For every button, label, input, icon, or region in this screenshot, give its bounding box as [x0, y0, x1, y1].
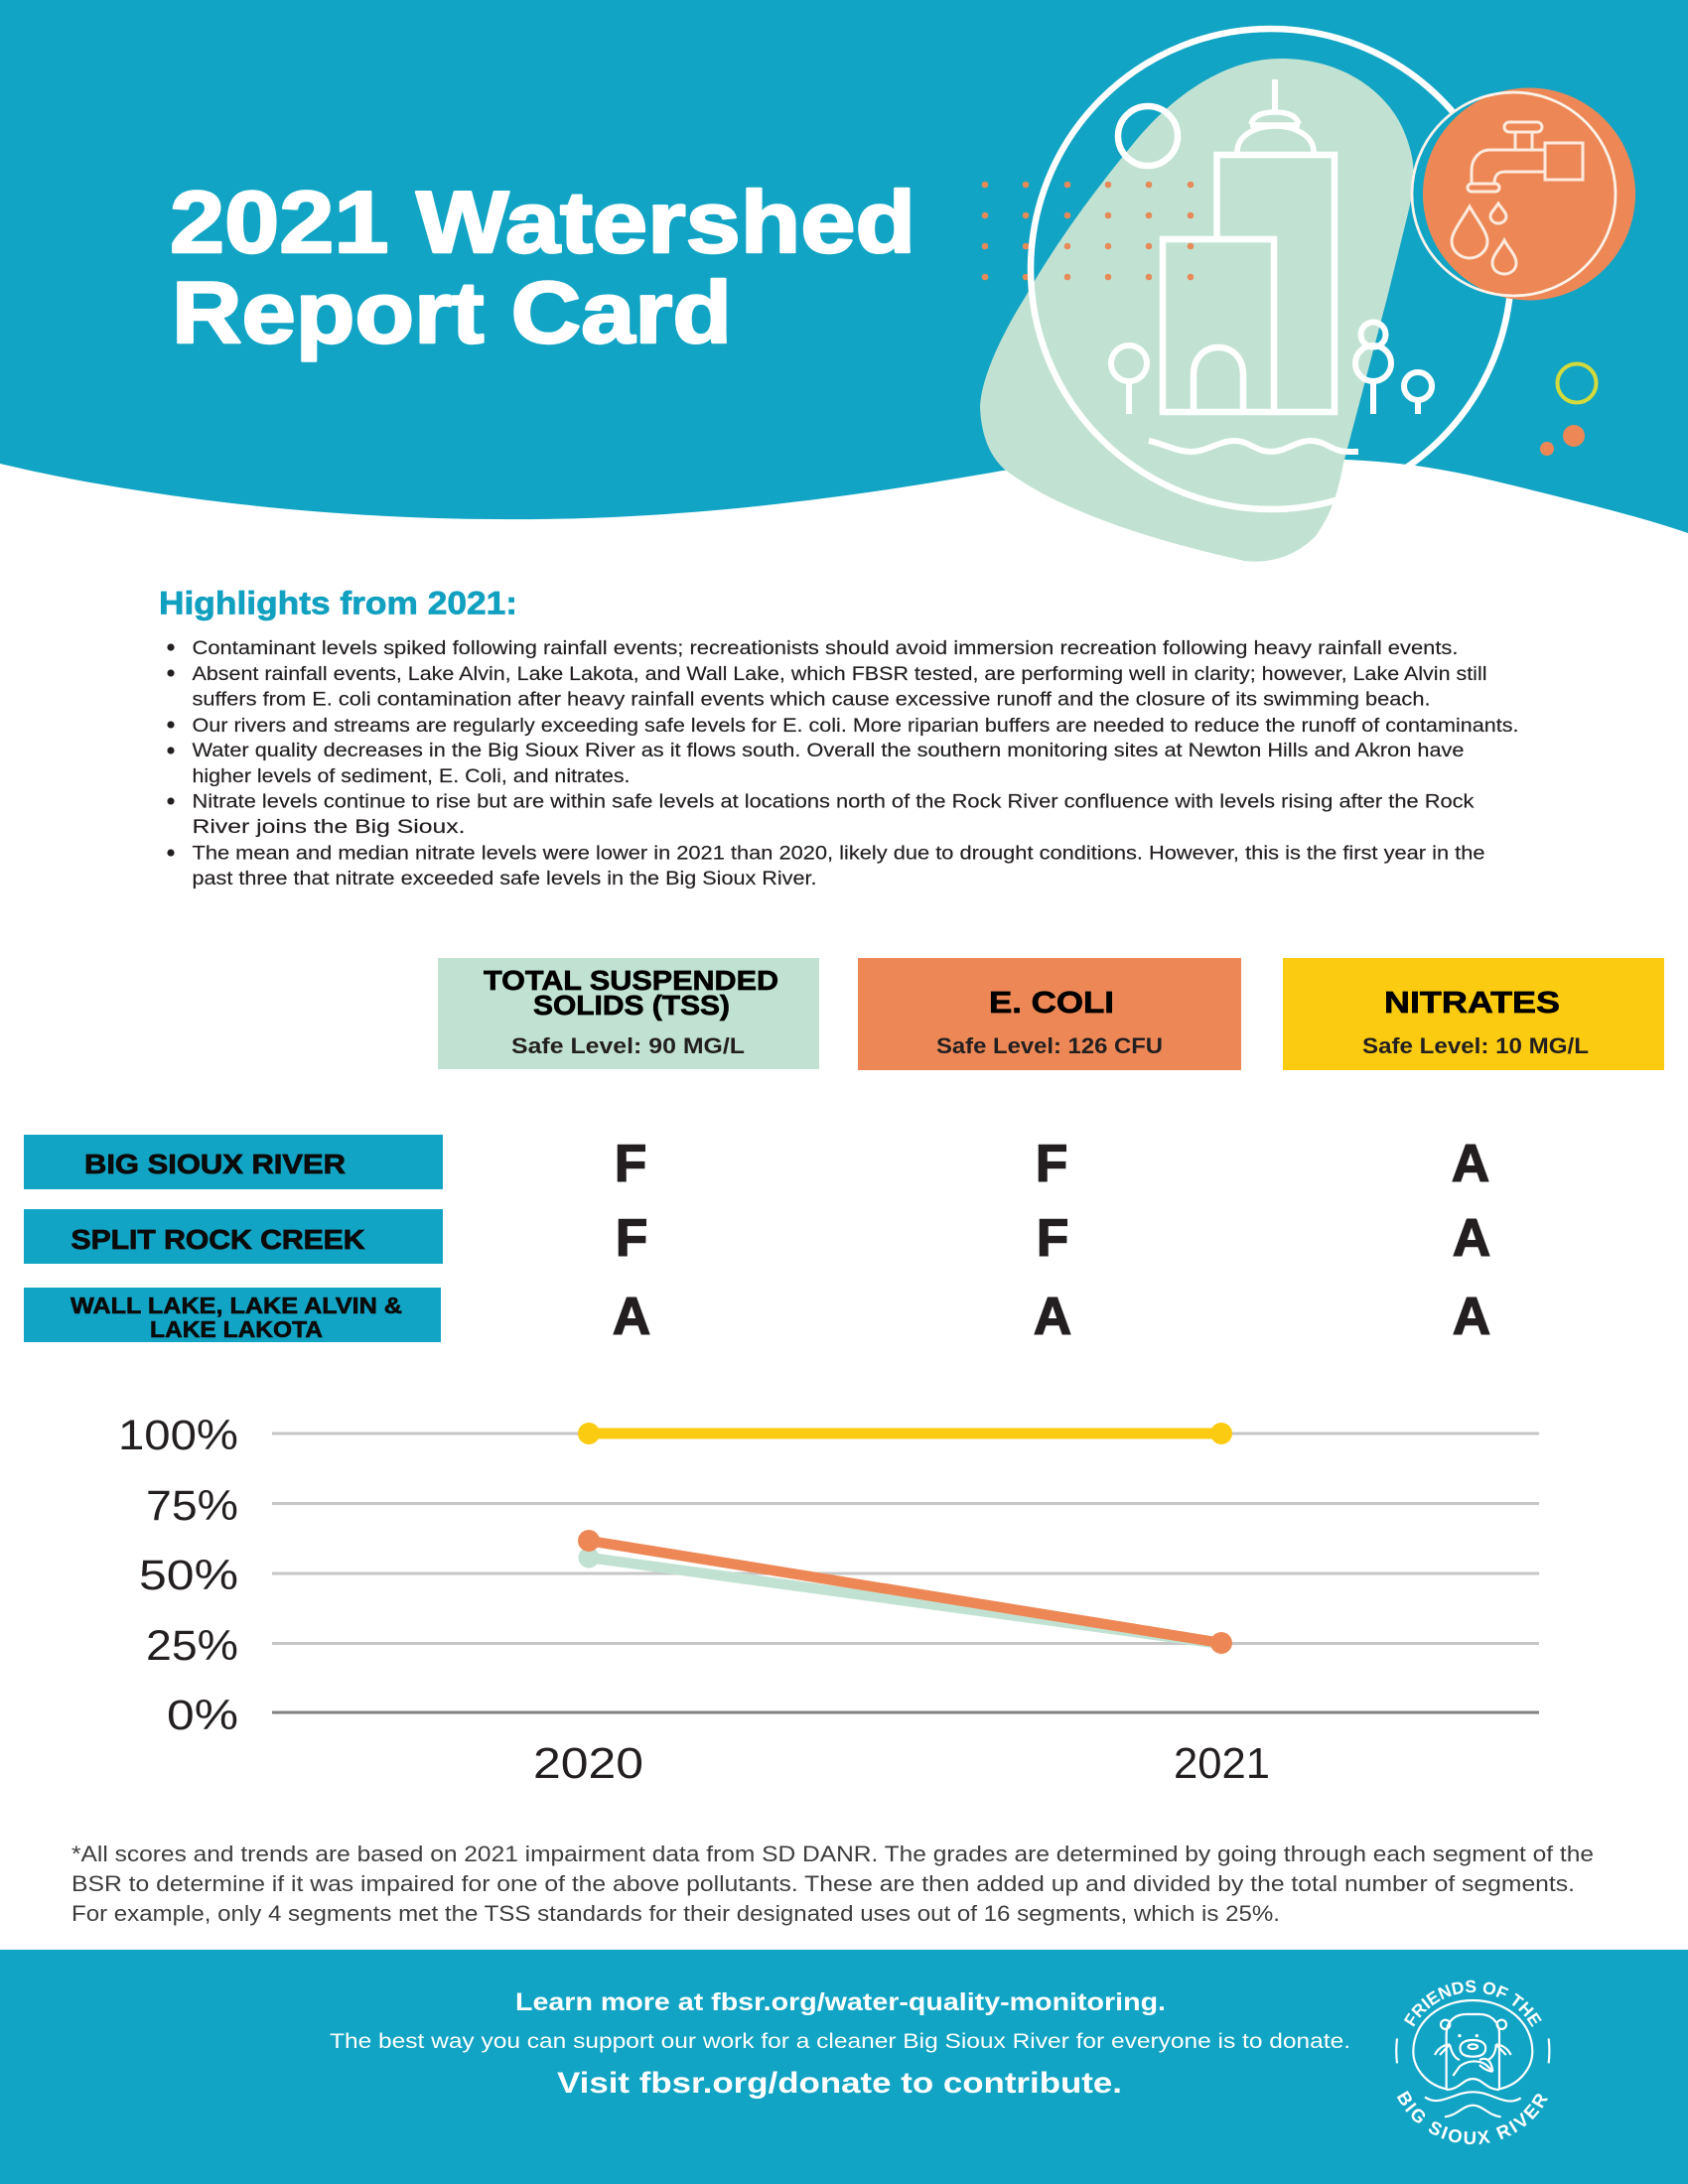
grades table: F [615, 1135, 646, 1193]
large white circle [1031, 29, 1511, 509]
grades table: A [1034, 1288, 1071, 1346]
column header: Nitrates: Safe Level: 10 MG/L [1362, 1033, 1589, 1058]
small white circle [1118, 106, 1178, 166]
row label: Split Rock Creek: SPLIT ROCK CREEK [71, 1224, 364, 1255]
column header: TSS: SOLIDS (TSS) [533, 990, 730, 1021]
y axis labels: 100% [118, 1412, 238, 1459]
x axis labels [533, 1739, 1270, 1788]
title: 2021 Watershed [170, 173, 915, 271]
logo: Friends of the Big Sioux River: BIG SIOUX RIVER [1396, 2091, 1549, 2144]
x axis labels: 2020 [533, 1739, 643, 1788]
grades table: F [616, 1209, 647, 1268]
row label: Big Sioux River [24, 1135, 443, 1189]
column header: TSS: TOTAL SUSPENDED [484, 965, 778, 996]
title [170, 173, 915, 361]
highlights bullet list: Contaminant levels spiked following rainfall events; recreationists should avoid immersion recreation following heavy rainfall events. [193, 638, 1458, 659]
highlights bullet list: past three that nitrate exceeded safe levels in the Big Sioux River. [193, 869, 816, 889]
column header: E. coli: E. COLI [989, 985, 1114, 1020]
grades table: A [1453, 1288, 1490, 1346]
row label: Big Sioux River: BIG SIOUX RIVER [84, 1149, 346, 1179]
highlights bullet list: suffers from E. coli contamination after heavy rainfall events which cause excessive runoff and the closure of its swimming beach. [193, 689, 1430, 711]
footer band [0, 1950, 1688, 2184]
footnote: BSR to determine if it was impaired for one of the above pollutants. These are then added up and divided by the total number of segments. [71, 1871, 1575, 1896]
column header: E. coli: Safe Level: 126 CFU [936, 1033, 1163, 1058]
footer text [330, 1988, 1350, 2100]
x axis labels: 2021 [1174, 1739, 1270, 1788]
y axis labels: 50% [139, 1552, 238, 1599]
column header: E. coli [858, 958, 1241, 1070]
highlights bullet list [167, 638, 1519, 889]
mint blob [980, 59, 1414, 562]
grades table: A [1452, 1135, 1489, 1193]
orange dots [1540, 425, 1585, 456]
column header: Nitrates: NITRATES [1384, 985, 1560, 1020]
column header: Nitrates [1283, 958, 1664, 1070]
icon: water wave [1149, 441, 1358, 452]
series: nitrates [578, 1423, 1232, 1444]
footer text: Visit fbsr.org/donate to contribute. [557, 2067, 1122, 2100]
y axis labels [118, 1412, 238, 1739]
title: Report Card [172, 263, 732, 361]
grades table: A [1453, 1209, 1490, 1268]
grades table: A [613, 1288, 650, 1346]
footnote: For example, only 4 segments met the TSS standards for their designated uses out of 16 segments, which is 25%. [71, 1901, 1280, 1926]
header banner with wave [0, 0, 1688, 533]
footnote: *All scores and trends are based on 2021 impairment data from SD DANR. The grades are determined by going through each segment of the [71, 1842, 1594, 1866]
column header: TSS: Safe Level: 90 MG/L [511, 1033, 745, 1058]
footer text: Learn more at fbsr.org/water-quality-monitoring. [515, 1988, 1166, 2016]
line chart [118, 1412, 1539, 1788]
grades table [613, 1135, 1490, 1346]
footer text: The best way you can support our work for a cleaner Big Sioux River for everyone is to donate. [330, 2029, 1350, 2053]
icon: city buildings [1163, 79, 1335, 412]
orange dot grid [982, 182, 1194, 280]
highlights bullet list: Absent rainfall events, Lake Alvin, Lake Lakota, and Wall Lake, which FBSR tested, are performing well in clarity; however, Lake Alvin still [193, 664, 1487, 685]
icon: trees [1111, 322, 1432, 414]
highlights bullet list: River joins the Big Sioux. [193, 817, 465, 838]
row label: Split Rock Creek [24, 1209, 443, 1264]
highlights bullet list: The mean and median nitrate levels were lower in 2021 than 2020, likely due to drought conditions. However, this is the first year in the [193, 844, 1485, 864]
series: E. coli [578, 1530, 1232, 1654]
row label: lakes: WALL LAKE, LAKE ALVIN & [70, 1293, 402, 1318]
footnote [71, 1842, 1594, 1926]
y axis labels: 0% [167, 1692, 238, 1739]
series: TSS [578, 1547, 1221, 1644]
yellow-green ring [1557, 363, 1597, 403]
heading: highlights: Highlights from 2021: [159, 586, 517, 621]
highlights bullet list: Our rivers and streams are regularly exceeding safe levels for E. coli. More riparian buffers are needed to reduce the runoff of contaminants. [193, 716, 1519, 737]
row label: lakes: LAKE LAKOTA [150, 1316, 323, 1342]
grades table: F [1036, 1135, 1067, 1193]
highlights bullet list: Nitrate levels continue to rise but are within safe levels at locations north of the Rock River confluence with levels rising after the Rock [193, 792, 1475, 812]
highlights bullet list: higher levels of sediment, E. Coli, and nitrates. [193, 766, 630, 787]
logo: Friends of the Big Sioux River [1395, 1979, 1551, 2144]
icon: faucet badge [1412, 87, 1635, 300]
grades table: F [1037, 1209, 1068, 1268]
highlights bullet list: Water quality decreases in the Big Sioux River as it flows south. Overall the southern monitoring sites at Newton Hills and Akron have [193, 741, 1464, 761]
header illustration [980, 29, 1635, 562]
y axis labels: 25% [146, 1622, 238, 1670]
row label: lakes [24, 1288, 441, 1342]
logo: Friends of the Big Sioux River: FRIENDS OF THE [1404, 1979, 1542, 2027]
y axis labels: 75% [146, 1482, 238, 1530]
column header: TSS [438, 958, 819, 1069]
